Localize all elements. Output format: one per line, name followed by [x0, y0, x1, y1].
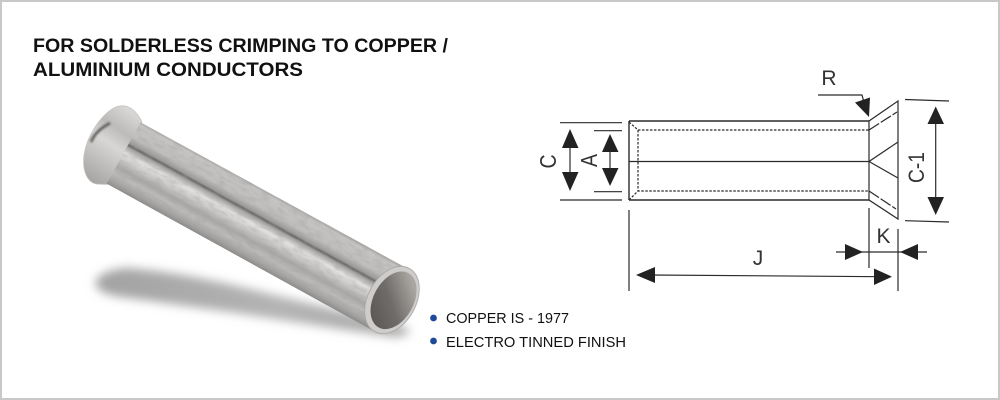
bullet list — [430, 311, 626, 351]
dimension J: J — [753, 247, 763, 270]
ferrule — [107, 121, 430, 343]
technical drawing — [536, 67, 949, 291]
dimension C — [536, 129, 578, 191]
tube bore — [361, 263, 426, 337]
dimension A: A — [577, 153, 602, 167]
dimension J — [636, 247, 892, 285]
bullet 1: COPPER IS - 1977 — [446, 311, 569, 327]
flange — [84, 106, 142, 184]
flared end — [869, 101, 898, 219]
extension lines — [560, 100, 949, 291]
product photo: ferrule with shadow — [84, 106, 430, 343]
drop shadow — [95, 268, 409, 337]
inner bore dashed — [629, 122, 869, 200]
dimension C: C — [536, 154, 561, 169]
dimension A — [577, 134, 618, 186]
title: FOR SOLDERLESS CRIMPING TO COPPER / — [33, 35, 449, 57]
bullet 2: ELECTRO TINNED FINISH — [446, 335, 626, 351]
dimension C-1 — [904, 106, 944, 215]
dimension R: R — [821, 67, 837, 90]
centre line — [629, 160, 869, 162]
title: ALUMINIUM CONDUCTORS — [33, 59, 303, 81]
surface mottling — [107, 121, 409, 332]
dimension K — [836, 225, 927, 260]
tube body — [107, 121, 409, 332]
dimension C-1: C-1 — [904, 152, 929, 183]
dimension R — [818, 67, 870, 117]
dimension K: K — [876, 225, 891, 248]
title — [33, 35, 449, 81]
tube outline — [629, 121, 869, 200]
dark streak on flange — [91, 123, 110, 142]
tube end ring — [354, 257, 430, 343]
